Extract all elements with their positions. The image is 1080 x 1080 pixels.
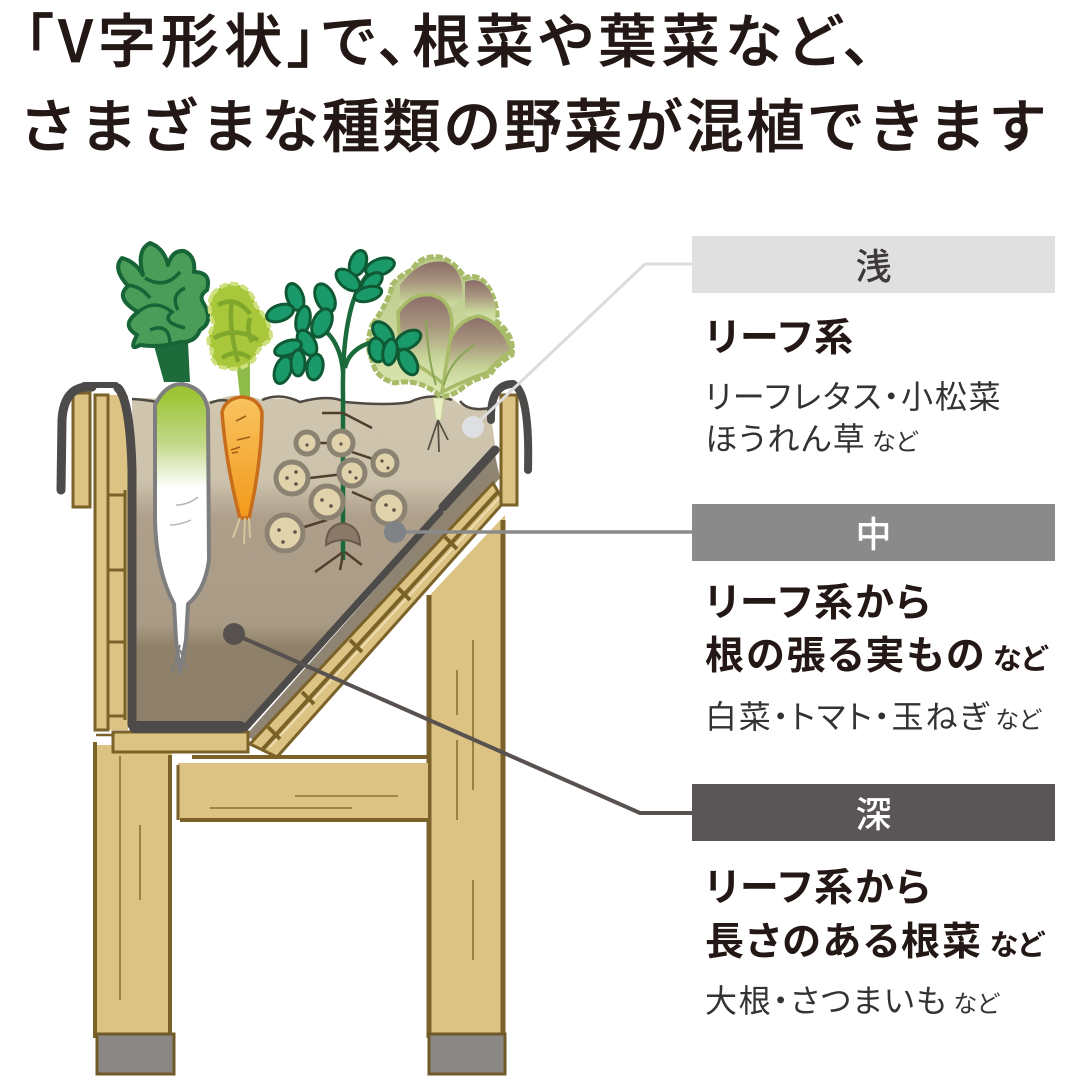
- heading: リーフ系から: [705, 572, 932, 628]
- wood: feet: [97, 1034, 505, 1074]
- leader line: medium: [384, 521, 692, 543]
- wood: cross bar: [178, 757, 428, 820]
- title: [19, 0, 1049, 164]
- potato plant: [264, 248, 424, 560]
- wood: left side planks: [73, 393, 248, 752]
- wood: right side plank: [501, 395, 517, 505]
- carrot: [222, 360, 262, 544]
- soil: [132, 395, 495, 727]
- parsley carrot top: [208, 284, 271, 369]
- detail text: ほうれん草 など: [705, 414, 918, 460]
- lettuce: [368, 257, 512, 452]
- label bar 中: [692, 504, 1055, 561]
- wood: diagonal planks: [246, 455, 504, 757]
- wood: left leg: [95, 742, 172, 1040]
- detail text: [705, 372, 1002, 460]
- heading: [705, 572, 1049, 681]
- heading: 根の張る実もの など: [705, 625, 1047, 681]
- title: さまざまな種類の野菜が混植できます: [19, 80, 1049, 164]
- daikon: [155, 384, 209, 672]
- heading: リーフ系から: [705, 857, 932, 913]
- panel: shallow: [692, 236, 1055, 460]
- leader line: deep: [223, 623, 692, 813]
- leader line: shallow: [462, 264, 692, 438]
- wood: right leg: [429, 515, 505, 1038]
- detail text: 大根・さつまいも など: [705, 976, 999, 1022]
- detail text: リーフレタス・小松菜: [705, 372, 1002, 418]
- planter liner: [61, 384, 528, 728]
- label bar 深: 深: [855, 786, 892, 838]
- label bar 浅: 浅: [855, 238, 892, 290]
- soil surface line: [132, 396, 490, 409]
- panel: medium: [692, 504, 1055, 738]
- daikon greens: [118, 243, 208, 382]
- heading: [705, 857, 1046, 967]
- label bar 浅: [692, 236, 1055, 293]
- potato roots and tubers: [267, 413, 405, 572]
- label bar 深: [692, 784, 1055, 841]
- heading: 長さのある根菜 など: [705, 911, 1044, 967]
- panel: deep: [692, 784, 1055, 1022]
- detail text: 白菜・トマト・玉ねぎ など: [705, 692, 1041, 738]
- heading: リーフ系: [705, 307, 855, 363]
- label bar 中: 中: [855, 506, 892, 558]
